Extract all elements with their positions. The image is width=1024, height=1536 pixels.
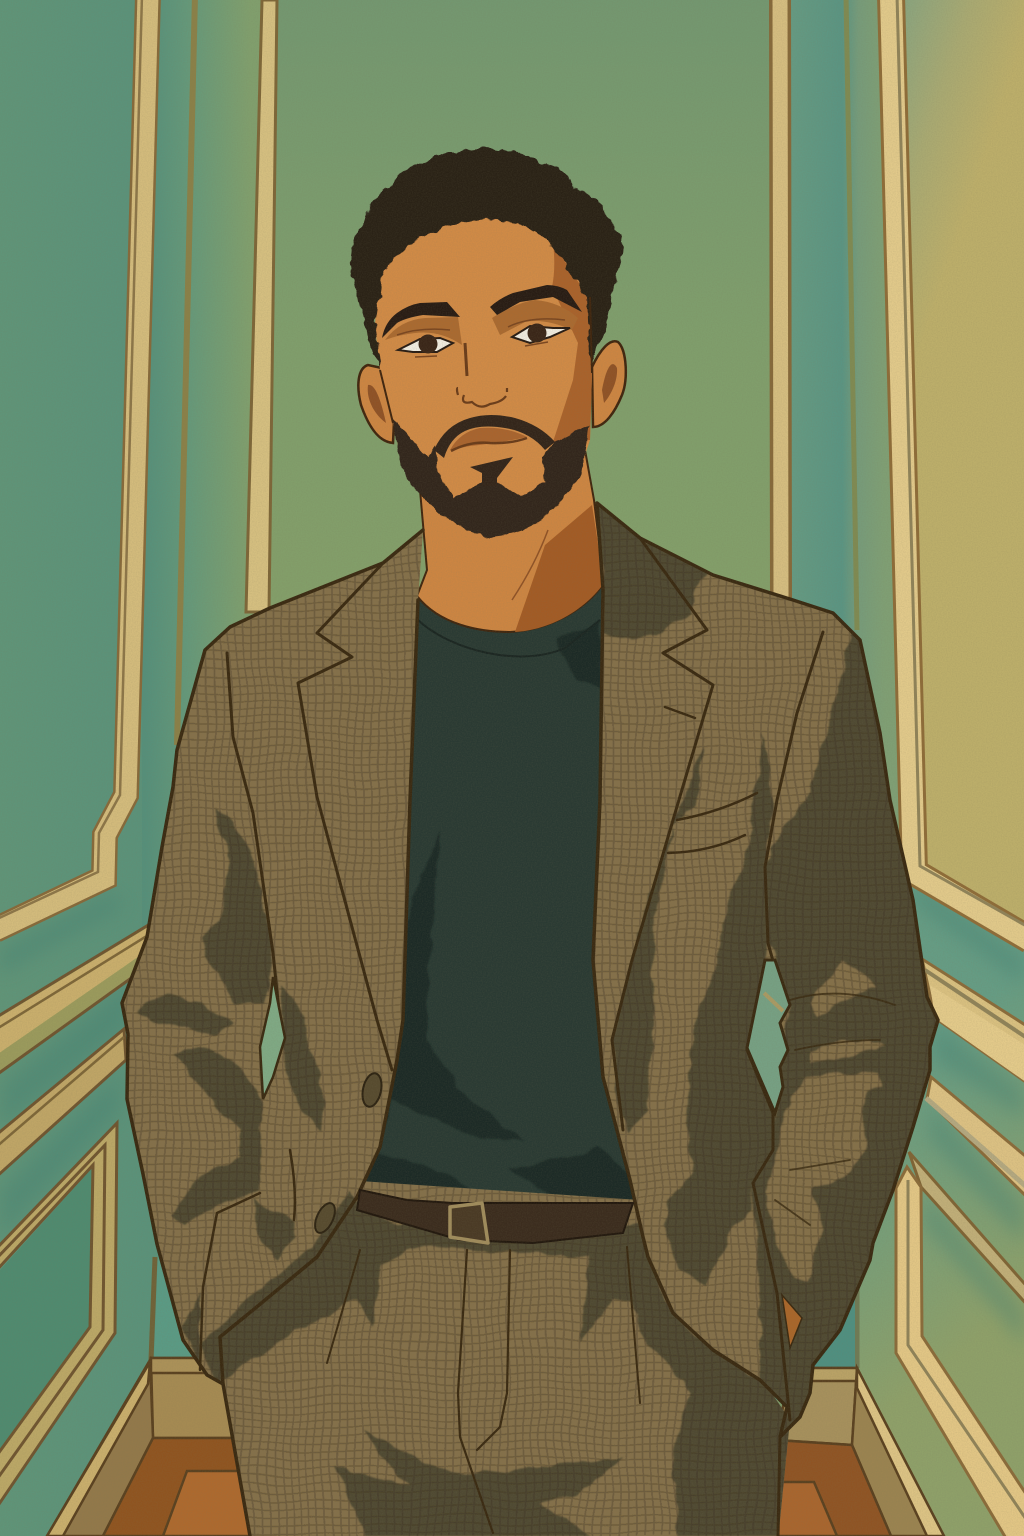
moustache xyxy=(434,415,555,458)
gap fill xyxy=(747,960,790,1113)
molding: right corner vertical xyxy=(854,1287,860,1368)
trousers: knee shadows xyxy=(337,1430,623,1536)
molding: right back corner xyxy=(780,0,781,598)
jacket: lower button xyxy=(311,1200,339,1236)
floor: right xyxy=(770,1440,891,1536)
head xyxy=(350,149,622,537)
molding: chair rail upper xyxy=(0,924,150,1076)
trousers xyxy=(208,1180,790,1536)
jacket outlines and details xyxy=(122,503,938,1536)
ears xyxy=(358,341,626,443)
belt: buckle xyxy=(450,1203,488,1243)
clothing shadows xyxy=(124,507,936,1536)
molding: outer left panel frame xyxy=(0,0,148,930)
molding: lower left frame inner bead xyxy=(0,1145,105,1482)
molding: right chair rail middle xyxy=(926,1077,1024,1200)
baseboard cap: back right xyxy=(811,1368,857,1381)
jacket: pocket flap xyxy=(668,793,757,853)
moldings: right wall xyxy=(780,0,1024,1536)
baseboard cap: left side xyxy=(47,1362,150,1536)
floor: left xyxy=(103,1438,260,1536)
baseboard: side right xyxy=(852,1368,944,1536)
nose xyxy=(457,343,507,407)
jacket: left outline xyxy=(122,530,423,1384)
jacket: lapel edge shadow xyxy=(673,743,703,825)
jacket: right sleeve seam xyxy=(765,632,823,997)
mouth: lips xyxy=(450,428,527,451)
jacket: buttonhole xyxy=(665,707,695,718)
eye: right xyxy=(508,319,570,346)
jacket: left half base xyxy=(122,530,423,1384)
t-shirt: collar line xyxy=(418,620,600,656)
molding: left thin corner line xyxy=(177,0,195,745)
face: right shadow xyxy=(552,243,592,442)
moldings: left wall xyxy=(0,0,277,1510)
figure xyxy=(120,146,940,1536)
face: skin xyxy=(375,211,592,535)
neck: shadow xyxy=(515,505,604,632)
baseboard: back right xyxy=(777,1368,857,1445)
jacket: lit patch lower sleeve xyxy=(763,1073,880,1283)
wall: centre back panel xyxy=(270,0,777,1100)
trousers: shadow at waistband xyxy=(400,1225,640,1257)
gap between right arm and torso xyxy=(747,960,790,1113)
trousers: fly lines xyxy=(458,1250,510,1533)
face: eye socket shade left xyxy=(385,317,462,345)
molding: lower right frame inner bead xyxy=(908,1180,1024,1525)
neck: skin xyxy=(417,450,604,632)
gap: rail seen through gap xyxy=(764,993,783,1011)
trousers: left outline xyxy=(223,1384,250,1536)
belt: strap xyxy=(357,1190,633,1243)
right hand in pocket xyxy=(782,1295,802,1348)
baseboard cap: right side xyxy=(857,1368,944,1536)
molding: right thin corner line xyxy=(846,0,857,630)
t-shirt: body xyxy=(350,580,640,1230)
t-shirt: shadow folds xyxy=(365,620,640,1208)
eye: left xyxy=(397,329,453,357)
molding: left back corner xyxy=(246,0,277,612)
belt xyxy=(357,1190,633,1243)
jacket: left lapel line xyxy=(298,563,392,1070)
molding: outer right panel frame xyxy=(891,0,1024,940)
jacket: upper button xyxy=(360,1072,384,1108)
molding: lower left panel frame xyxy=(0,1123,117,1510)
jacket: left pocket lines xyxy=(200,1150,295,1370)
jacket: right lapel line xyxy=(612,538,713,1130)
baseboard and floor: right xyxy=(770,1368,944,1536)
molding: left corner vertical xyxy=(151,1257,155,1360)
floor inset: right xyxy=(770,1482,837,1536)
eyebrow: right xyxy=(490,285,582,315)
ear: right xyxy=(592,341,626,427)
teal behind right hip xyxy=(800,1290,855,1368)
trousers: shadow under left jacket hem xyxy=(200,1190,460,1385)
jacket: right sleeve shadow xyxy=(753,628,945,1440)
ear: left xyxy=(358,365,395,443)
molding: lower right panel frame xyxy=(896,1167,1024,1536)
baseboard: side left xyxy=(47,1360,153,1536)
neck: tendon line xyxy=(512,530,548,600)
wall: right inner strip xyxy=(775,0,900,1400)
jacket: left sleeve seam xyxy=(227,653,280,1020)
wall: far left panel xyxy=(0,0,175,1536)
jacket: right half base xyxy=(593,503,938,1437)
trousers: right outline xyxy=(778,1437,780,1536)
jacket: left arm shadows xyxy=(137,807,325,1368)
face: eye socket shade right xyxy=(492,300,578,335)
jacket: right outline xyxy=(593,503,938,1437)
molding: chair rail lower xyxy=(0,1029,126,1178)
wall: lower left panel tint xyxy=(0,1165,95,1454)
baseboard cap: back left xyxy=(151,1358,240,1373)
jacket: right collar shadow xyxy=(597,503,710,640)
baseboard: back left xyxy=(151,1358,240,1438)
baseboard and floor: left xyxy=(47,1358,260,1536)
wall: left inner strip xyxy=(142,0,277,1100)
jacket: right side line xyxy=(747,1050,790,1420)
neck xyxy=(417,450,604,632)
beard: soul patch xyxy=(470,457,513,486)
hair xyxy=(350,149,622,370)
jacket: sleeve wrinkle lines xyxy=(775,994,895,1225)
wall: soft shading under moldings xyxy=(0,880,1024,1345)
jacket: right torso shadow xyxy=(663,733,773,1287)
t-shirt xyxy=(350,580,640,1230)
trousers: pleats xyxy=(327,1247,640,1403)
jacket: lit patch mid sleeve xyxy=(810,1040,887,1063)
molding: right chair rail upper xyxy=(922,959,1024,1085)
gap between left arm and torso xyxy=(260,977,285,1099)
eyebrow: left xyxy=(382,302,460,338)
wall: far right lower xyxy=(850,860,1024,1536)
tweed weave texture xyxy=(124,509,935,1536)
beard xyxy=(392,398,593,537)
trousers: shadow right xyxy=(580,1227,790,1536)
molding: right rail thin xyxy=(909,1152,1024,1308)
jacket: lit patch upper sleeve xyxy=(810,960,877,1017)
teal behind left hip xyxy=(154,1250,200,1358)
wall: far right panel xyxy=(895,0,1024,950)
floor inset: left xyxy=(163,1471,260,1536)
jacket: lower lapel shadow xyxy=(613,820,673,1133)
face: jaw outline xyxy=(380,297,592,423)
